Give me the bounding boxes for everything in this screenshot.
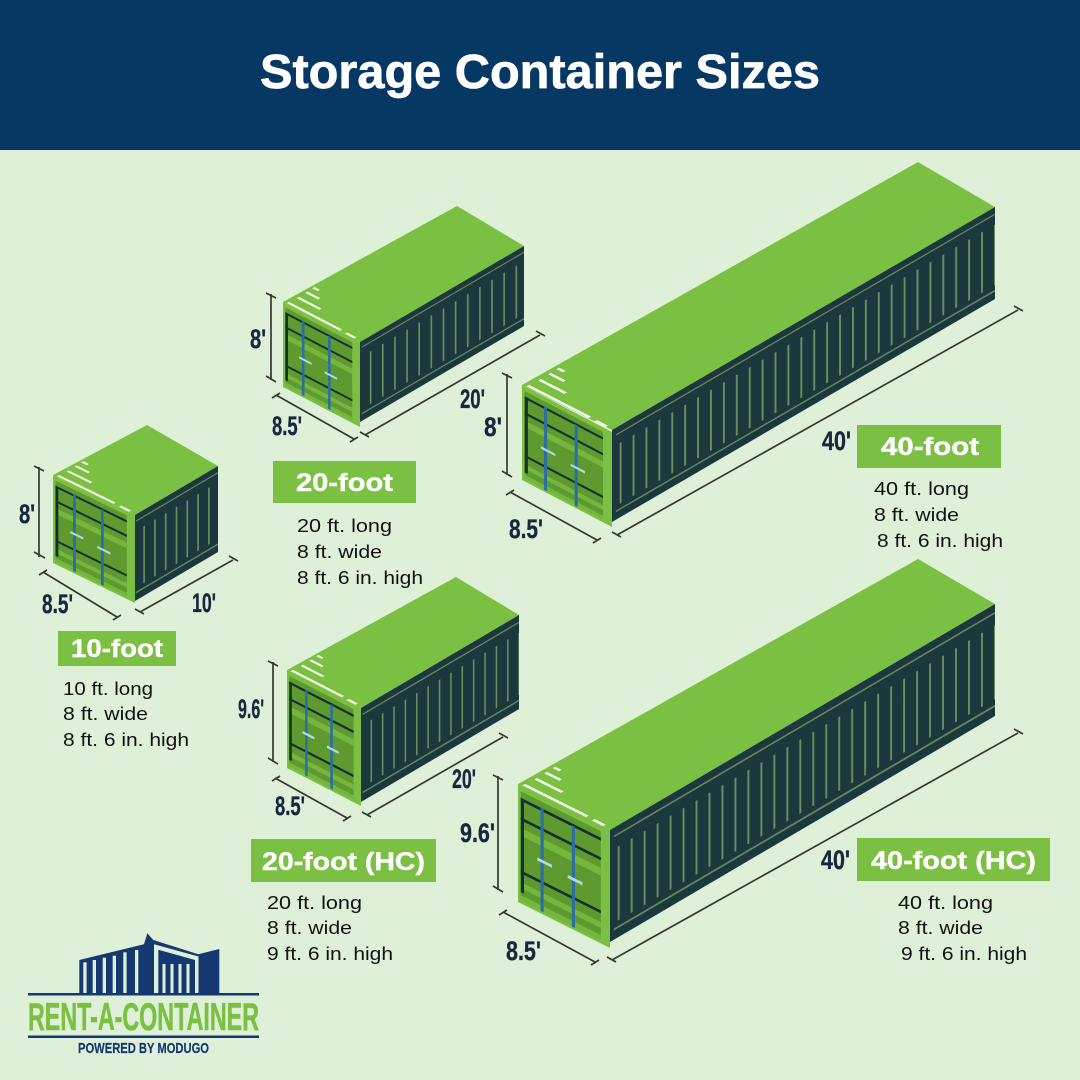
specs: 10-foot: 8 ft. wide [63, 703, 148, 724]
dimensions: 40-foot high cube [460, 729, 1023, 966]
specs: 40-foot high cube [898, 892, 1027, 964]
specs: 20-foot high cube: 9 ft. 6 in. high [267, 943, 393, 964]
label: 10-foot: 10-foot [71, 635, 164, 663]
dimensions: 10-foot [19, 466, 238, 620]
label: 40-foot: 40-foot [881, 433, 980, 461]
specs: 40-foot high cube: 9 ft. 6 in. high [901, 943, 1027, 964]
specs: 10-foot: 10 ft. long [63, 678, 153, 699]
dimensions: 10-foot: 8.5' [42, 589, 73, 619]
dimensions: 40-foot: 8.5' [509, 514, 543, 544]
title: Storage Container Sizes [260, 46, 820, 99]
specs: 40-foot: 8 ft. 6 in. high [877, 530, 1003, 551]
dimensions: 40-foot high cube: 8.5' [506, 936, 541, 966]
label: 40-foot high cube [857, 838, 1050, 881]
dimensions: 20-foot: 8.5' [272, 411, 302, 441]
dimensions: 20-foot high cube: 20' [452, 764, 476, 794]
dimensions: 20-foot high cube: 9.6' [238, 694, 264, 724]
logo: Rent-A-Container [28, 933, 259, 1057]
label: 20-foot high cube: 20-foot (HC) [262, 848, 425, 876]
container: 40-foot high cube [518, 559, 995, 948]
specs: 20-foot [297, 515, 423, 588]
dimensions: 40-foot high cube: 40' [821, 845, 850, 875]
specs: 10-foot: 8 ft. 6 in. high [63, 729, 189, 750]
dimensions: 20-foot high cube: 8.5' [275, 791, 305, 821]
dimensions: 20-foot: 8' [250, 324, 266, 354]
dimensions: 20-foot [250, 293, 545, 442]
logo tagline: POWERED BY MODUGO [78, 1040, 209, 1057]
label: 40-foot [857, 425, 1001, 468]
dimensions: 20-foot: 20' [460, 384, 485, 414]
dimensions: 20-foot high cube [238, 661, 508, 821]
specs: 40-foot high cube: 40 ft. long [898, 892, 993, 913]
specs: 20-foot high cube [267, 892, 393, 964]
specs: 20-foot high cube: 20 ft. long [267, 892, 362, 913]
specs: 20-foot: 20 ft. long [297, 515, 392, 536]
label: 20-foot: 20-foot [296, 469, 394, 497]
container: 10-foot [53, 425, 218, 603]
specs: 40-foot [874, 478, 1003, 551]
logo building [28, 933, 259, 996]
specs: 40-foot: 8 ft. wide [874, 504, 959, 525]
dimensions: 40-foot high cube: 9.6' [460, 818, 495, 848]
container: 20-foot high cube [287, 577, 519, 806]
container: 40-foot [522, 162, 995, 527]
title banner [0, 0, 1080, 150]
label: 20-foot high cube [251, 839, 436, 882]
specs: 40-foot: 40 ft. long [874, 478, 969, 499]
label: 10-foot [58, 631, 176, 666]
dimensions: 40-foot: 8' [484, 412, 502, 442]
dimensions: 40-foot [484, 306, 1023, 544]
logo cut-outs [83, 944, 198, 993]
dimensions: 40-foot: 40' [822, 426, 851, 456]
logo wordmark: RENT-A-CONTAINER [28, 996, 259, 1039]
label: 40-foot high cube: 40-foot (HC) [871, 847, 1036, 875]
specs: 20-foot: 8 ft. wide [297, 541, 382, 562]
specs: 20-foot: 8 ft. 6 in. high [297, 567, 423, 588]
dimensions: 10-foot: 10' [192, 588, 216, 618]
dimensions: 10-foot: 8' [19, 499, 35, 529]
specs: 40-foot high cube: 8 ft. wide [898, 917, 983, 938]
label: 20-foot [273, 461, 416, 503]
container: 20-foot [283, 206, 524, 427]
specs: 10-foot [63, 678, 189, 750]
specs: 20-foot high cube: 8 ft. wide [267, 917, 352, 938]
